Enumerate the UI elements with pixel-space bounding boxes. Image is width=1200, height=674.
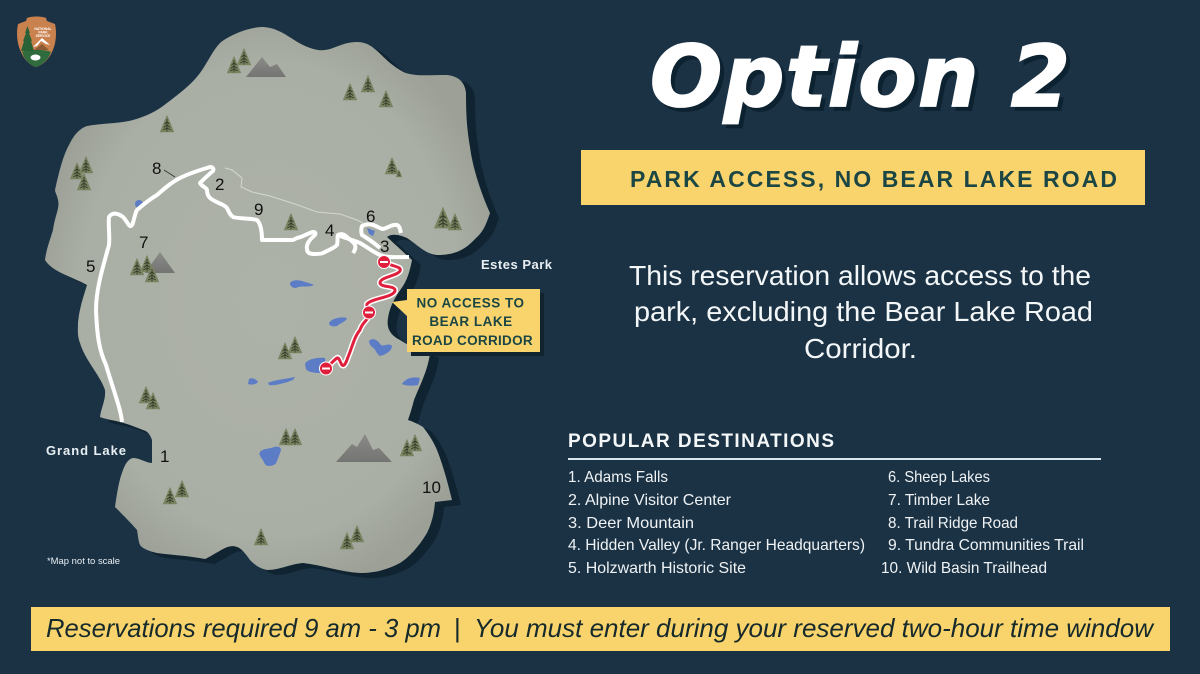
destination numbers: 9 bbox=[254, 200, 263, 219]
mountain: Timber Lake bbox=[145, 252, 175, 273]
callout: no access: NO ACCESS TO bbox=[416, 296, 525, 310]
description text: park, excluding the Bear Lake Road bbox=[634, 296, 1093, 327]
description text bbox=[629, 260, 1093, 364]
title: Option 2 bbox=[654, 32, 1074, 131]
icon: National Park Service arrowhead: SERVICE bbox=[36, 34, 51, 38]
destinations list: column 1 bbox=[568, 469, 865, 577]
mountain: north bbox=[246, 57, 286, 77]
lakes bbox=[135, 200, 420, 466]
icon: National Park Service arrowhead: NATIONAL bbox=[34, 27, 52, 31]
trees bbox=[70, 48, 462, 549]
destination numbers: 8 bbox=[152, 159, 161, 178]
destination numbers: 7 bbox=[139, 233, 148, 252]
destination numbers: 10 bbox=[422, 478, 441, 497]
closed Bear Lake Road bbox=[326, 262, 400, 368]
destinations list: column 1: 2. Alpine Visitor Center bbox=[568, 492, 732, 509]
destinations list: column 1: 4. Hidden Valley (Jr. Ranger Headquarters) bbox=[568, 537, 865, 554]
Trail Ridge Road leader line bbox=[164, 170, 175, 177]
banner: reservation hours: Reservations required 9 am - 3 pm bbox=[46, 613, 441, 643]
callout: no access: ROAD CORRIDOR bbox=[412, 333, 533, 348]
destination numbers: 4 bbox=[325, 221, 334, 240]
description text: Corridor. bbox=[804, 333, 917, 364]
map of the park bbox=[45, 27, 553, 578]
banner: reservation hours: | bbox=[454, 613, 461, 643]
destinations list: column 2: 6. Sheep Lakes bbox=[888, 469, 990, 486]
mountains bbox=[145, 57, 392, 462]
popular destinations heading: POPULAR DESTINATIONS bbox=[568, 431, 834, 452]
destinations list: column 2: 7. Timber Lake bbox=[888, 492, 990, 509]
destinations list: column 2: 8. Trail Ridge Road bbox=[888, 515, 1018, 532]
destinations list: column 1: 1. Adams Falls bbox=[568, 469, 668, 486]
mountain: south bbox=[336, 434, 392, 462]
no-entry markers bbox=[320, 256, 390, 375]
destination numbers bbox=[86, 159, 441, 497]
destination numbers: 2 bbox=[215, 175, 224, 194]
Tundra Communities Trail bbox=[225, 168, 363, 223]
label: Grand Lake: Grand Lake bbox=[46, 443, 126, 458]
banner: park access: PARK ACCESS, NO BEAR LAKE ROAD bbox=[630, 166, 1117, 192]
destinations list: column 1: 5. Holzwarth Historic Site bbox=[568, 560, 746, 577]
title: Option 2 bbox=[650, 28, 1070, 127]
banner: reservation hours bbox=[31, 607, 1170, 651]
destinations list: column 2: 10. Wild Basin Trailhead bbox=[881, 560, 1047, 577]
map land shadow bbox=[54, 32, 499, 578]
note: map not to scale: *Map not to scale bbox=[47, 556, 120, 567]
destinations list: column 2 bbox=[881, 469, 1084, 577]
open roads bbox=[96, 167, 409, 422]
destination numbers: 1 bbox=[160, 447, 169, 466]
label: Estes Park: Estes Park bbox=[481, 257, 553, 272]
description text: This reservation allows access to the bbox=[629, 260, 1091, 291]
icon: National Park Service arrowhead: PARK bbox=[38, 30, 48, 34]
icon: National Park Service arrowhead bbox=[17, 16, 56, 67]
destinations list: column 1: 3. Deer Mountain bbox=[568, 515, 694, 532]
banner: park access bbox=[581, 150, 1145, 205]
map land bbox=[45, 27, 490, 573]
destination numbers: 3 bbox=[380, 237, 389, 256]
banner: reservation hours: You must enter during your reserved two-hour time window bbox=[474, 613, 1155, 643]
callout: no access: BEAR LAKE bbox=[429, 314, 513, 329]
destination numbers: 5 bbox=[86, 257, 95, 276]
destinations list: column 2: 9. Tundra Communities Trail bbox=[888, 537, 1084, 554]
destination numbers: 6 bbox=[366, 207, 375, 226]
callout: no access bbox=[392, 289, 544, 356]
